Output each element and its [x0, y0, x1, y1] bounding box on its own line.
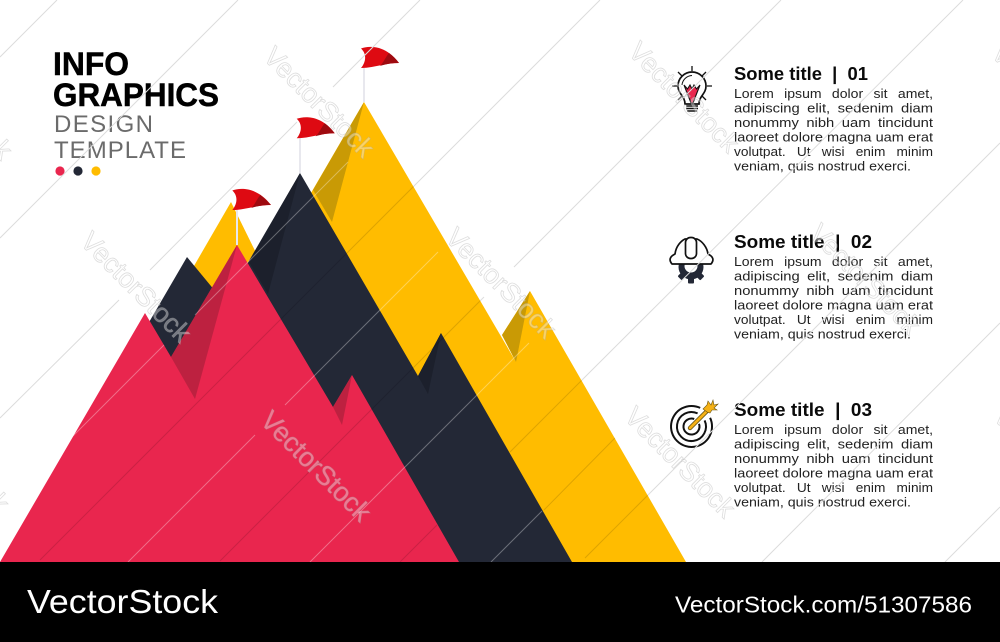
footer bar: VectorStock [27, 583, 219, 620]
watermark: VectorStock repeated [0, 36, 1000, 528]
icon: hard hat and gear [670, 238, 713, 284]
text block 02: Some title | 02 [734, 231, 872, 252]
mountain: navy middle range [120, 173, 572, 562]
watermark: VectorStock repeated: VectorStock [258, 41, 380, 164]
text block 01: volutpat. Ut wisi enim minim [734, 144, 933, 159]
text block 02: adipiscing elit, sedenim diam [734, 268, 933, 284]
title [53, 46, 219, 164]
watermark: VectorStock repeated: VectorStock [440, 222, 562, 345]
watermark: VectorStock repeated: VectorStock [804, 218, 926, 341]
text block 01: Some title | 01 [734, 63, 868, 84]
text block 03: veniam, quis nostrud exerci. [734, 494, 911, 510]
title: GRAPHICS [53, 77, 219, 113]
flag on yellow peak [361, 47, 399, 102]
title: TEMPLATE [54, 137, 186, 164]
watermark: VectorStock repeated: VectorStock [619, 401, 741, 524]
mountain: yellow back range [150, 102, 686, 562]
text block 02: laoreet dolore magna uam erat [734, 298, 933, 312]
text block 02: veniam, quis nostrud exerci. [734, 326, 911, 342]
text block 02: nonummy nibh uam tincidunt [734, 283, 933, 298]
watermark: VectorStock repeated: VectorStock [75, 226, 197, 349]
text block 01: veniam, quis nostrud exerci. [734, 158, 911, 174]
text block 03: laoreet dolore magna uam erat [734, 466, 933, 480]
flag on navy peak [297, 117, 335, 173]
text block 01: Lorem ipsum dolor sit amet, [734, 86, 933, 101]
text block 01: adipiscing elit, sedenim diam [734, 100, 933, 116]
footer bar: VectorStock.com/51307586 [675, 592, 972, 618]
text block 02 [734, 231, 933, 342]
text block 03: Some title | 03 [734, 399, 872, 420]
text block 02: volutpat. Ut wisi enim minim [734, 312, 933, 327]
text block 02: Lorem ipsum dolor sit amet, [734, 254, 933, 269]
text block 01: nonummy nibh uam tincidunt [734, 115, 933, 130]
text block 03 [734, 399, 933, 510]
mountain: red front range [0, 245, 459, 562]
watermark: VectorStock repeated: VectorStock [623, 36, 745, 159]
footer bar [0, 562, 1000, 642]
icon: light bulb [672, 66, 712, 111]
icon: dart target [671, 400, 718, 447]
text block 03: Lorem ipsum dolor sit amet, [734, 422, 933, 437]
title: DESIGN [54, 111, 153, 138]
text block 03: nonummy nibh uam tincidunt [734, 451, 933, 466]
watermark: VectorStock repeated: VectorStock [255, 405, 377, 528]
title: INFO [53, 46, 129, 82]
text block 01 [734, 63, 933, 174]
text block 03: adipiscing elit, sedenim diam [734, 436, 933, 452]
colour dots [55, 166, 101, 176]
text block 03: volutpat. Ut wisi enim minim [734, 480, 933, 495]
text block 01: laoreet dolore magna uam erat [734, 130, 933, 144]
flag on red peak [232, 189, 271, 245]
